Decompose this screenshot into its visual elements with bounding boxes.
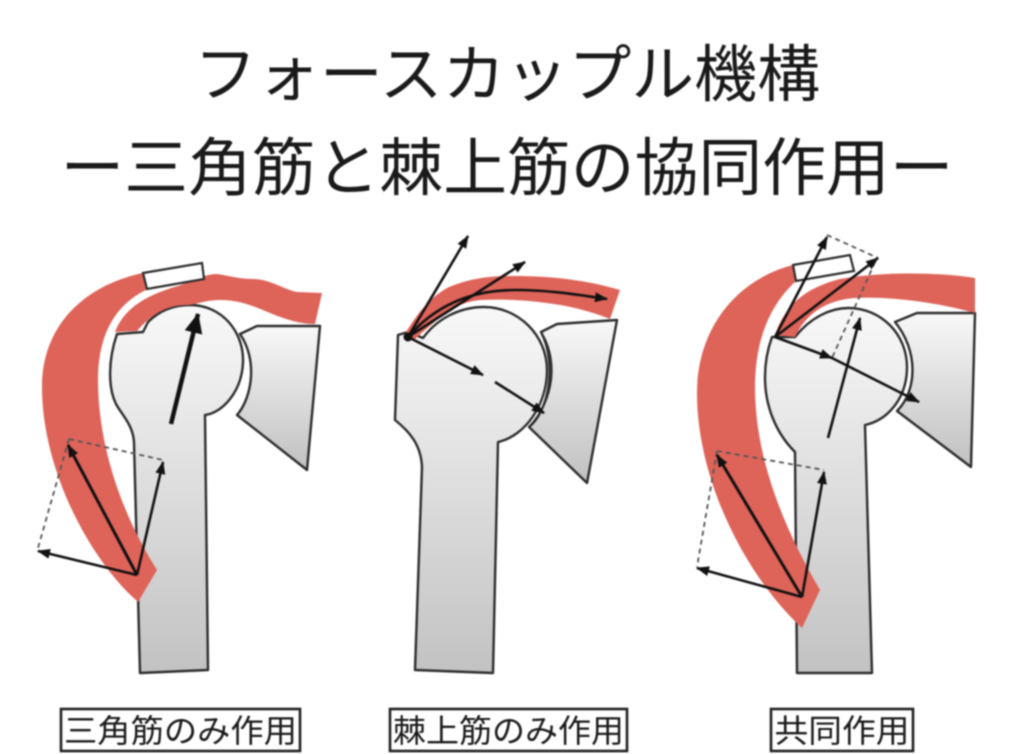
- force vectors: [697, 235, 919, 597]
- panel: deltoid only: [38, 263, 322, 673]
- humerus: [395, 307, 547, 673]
- label: supraspinatus only: 棘上筋のみ作用: [393, 713, 624, 749]
- acromion: [143, 263, 204, 289]
- humerus: [765, 308, 907, 673]
- supraspinatus muscle: [775, 274, 975, 337]
- scapula: [529, 320, 617, 483]
- force vectors: [38, 314, 198, 575]
- panel: supraspinatus only: [395, 236, 620, 673]
- panel: combined action: [697, 235, 975, 673]
- acromion: [793, 255, 854, 281]
- joint gap arc: [529, 332, 552, 427]
- scapula: [237, 326, 320, 470]
- deltoid muscle: [697, 265, 820, 628]
- force vectors: [404, 236, 607, 413]
- scapula: [895, 313, 975, 467]
- title line 1: フォースカップル機構: [194, 41, 820, 110]
- title line 2: ー三角筋と棘上筋の協同作用ー: [60, 134, 954, 204]
- deltoid muscle: [42, 273, 157, 602]
- label: deltoid only: 三角筋のみ作用: [64, 713, 297, 749]
- supraspinatus muscle: [115, 274, 322, 332]
- label: combined action: 共同作用: [774, 713, 910, 749]
- title: [60, 41, 954, 204]
- humerus: [110, 305, 243, 673]
- supraspinatus muscle: [406, 276, 620, 341]
